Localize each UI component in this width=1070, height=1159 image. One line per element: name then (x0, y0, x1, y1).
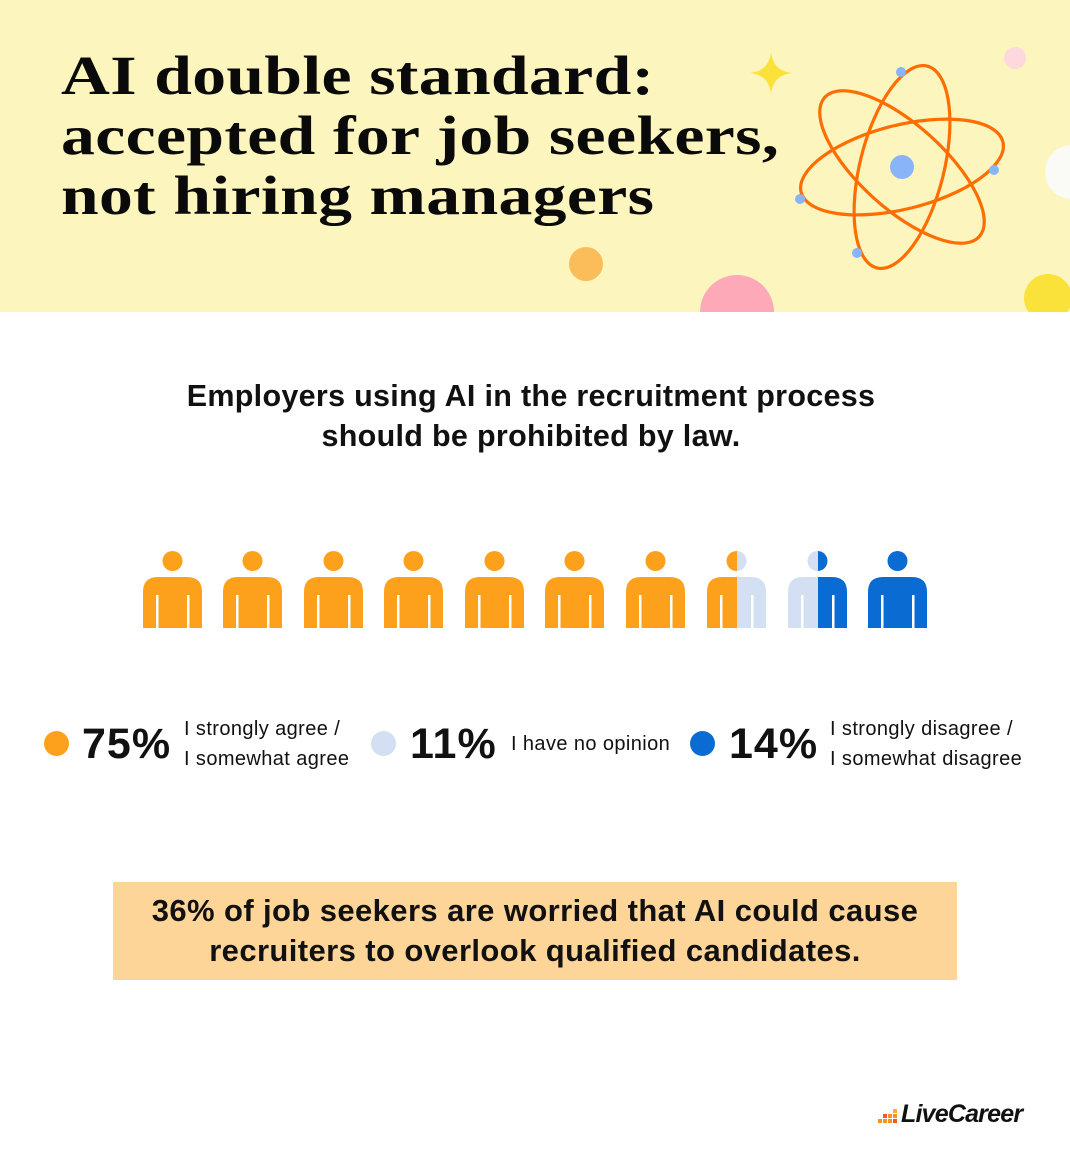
decorative circles (569, 47, 1070, 312)
title (61, 45, 779, 226)
legend: no opinion: 11% (410, 720, 497, 768)
title: not hiring managers (61, 165, 654, 226)
legend: agree: I somewhat agree (184, 748, 349, 770)
legend: disagree: I strongly disagree / (830, 718, 1013, 740)
legend: disagree: I somewhat disagree (830, 748, 1022, 770)
legend: agree: I strongly agree / (184, 718, 340, 740)
title: accepted for job seekers, (61, 105, 779, 166)
pictogram chart (143, 551, 927, 628)
callout box: 36% of job seekers are worried that AI could cause (152, 893, 918, 928)
legend: no opinion: I have no opinion (511, 733, 670, 755)
subtitle: should be prohibited by law. (321, 419, 741, 453)
title: AI double standard: (61, 45, 654, 106)
subtitle: Employers using AI in the recruitment process (187, 379, 875, 413)
logo: LiveCareer: LiveCareer (901, 1100, 1022, 1128)
callout box: recruiters to overlook qualified candidates. (209, 933, 861, 968)
callout box (113, 882, 957, 980)
legend: agree: 75% (82, 720, 171, 768)
legend (44, 718, 1022, 770)
subtitle (187, 379, 875, 453)
legend: disagree: 14% (729, 720, 818, 768)
header panel (0, 0, 1070, 312)
legend: disagree (690, 718, 1022, 770)
icon: atom (795, 64, 1005, 270)
legend: agree (44, 718, 349, 770)
legend: no opinion (371, 720, 670, 768)
